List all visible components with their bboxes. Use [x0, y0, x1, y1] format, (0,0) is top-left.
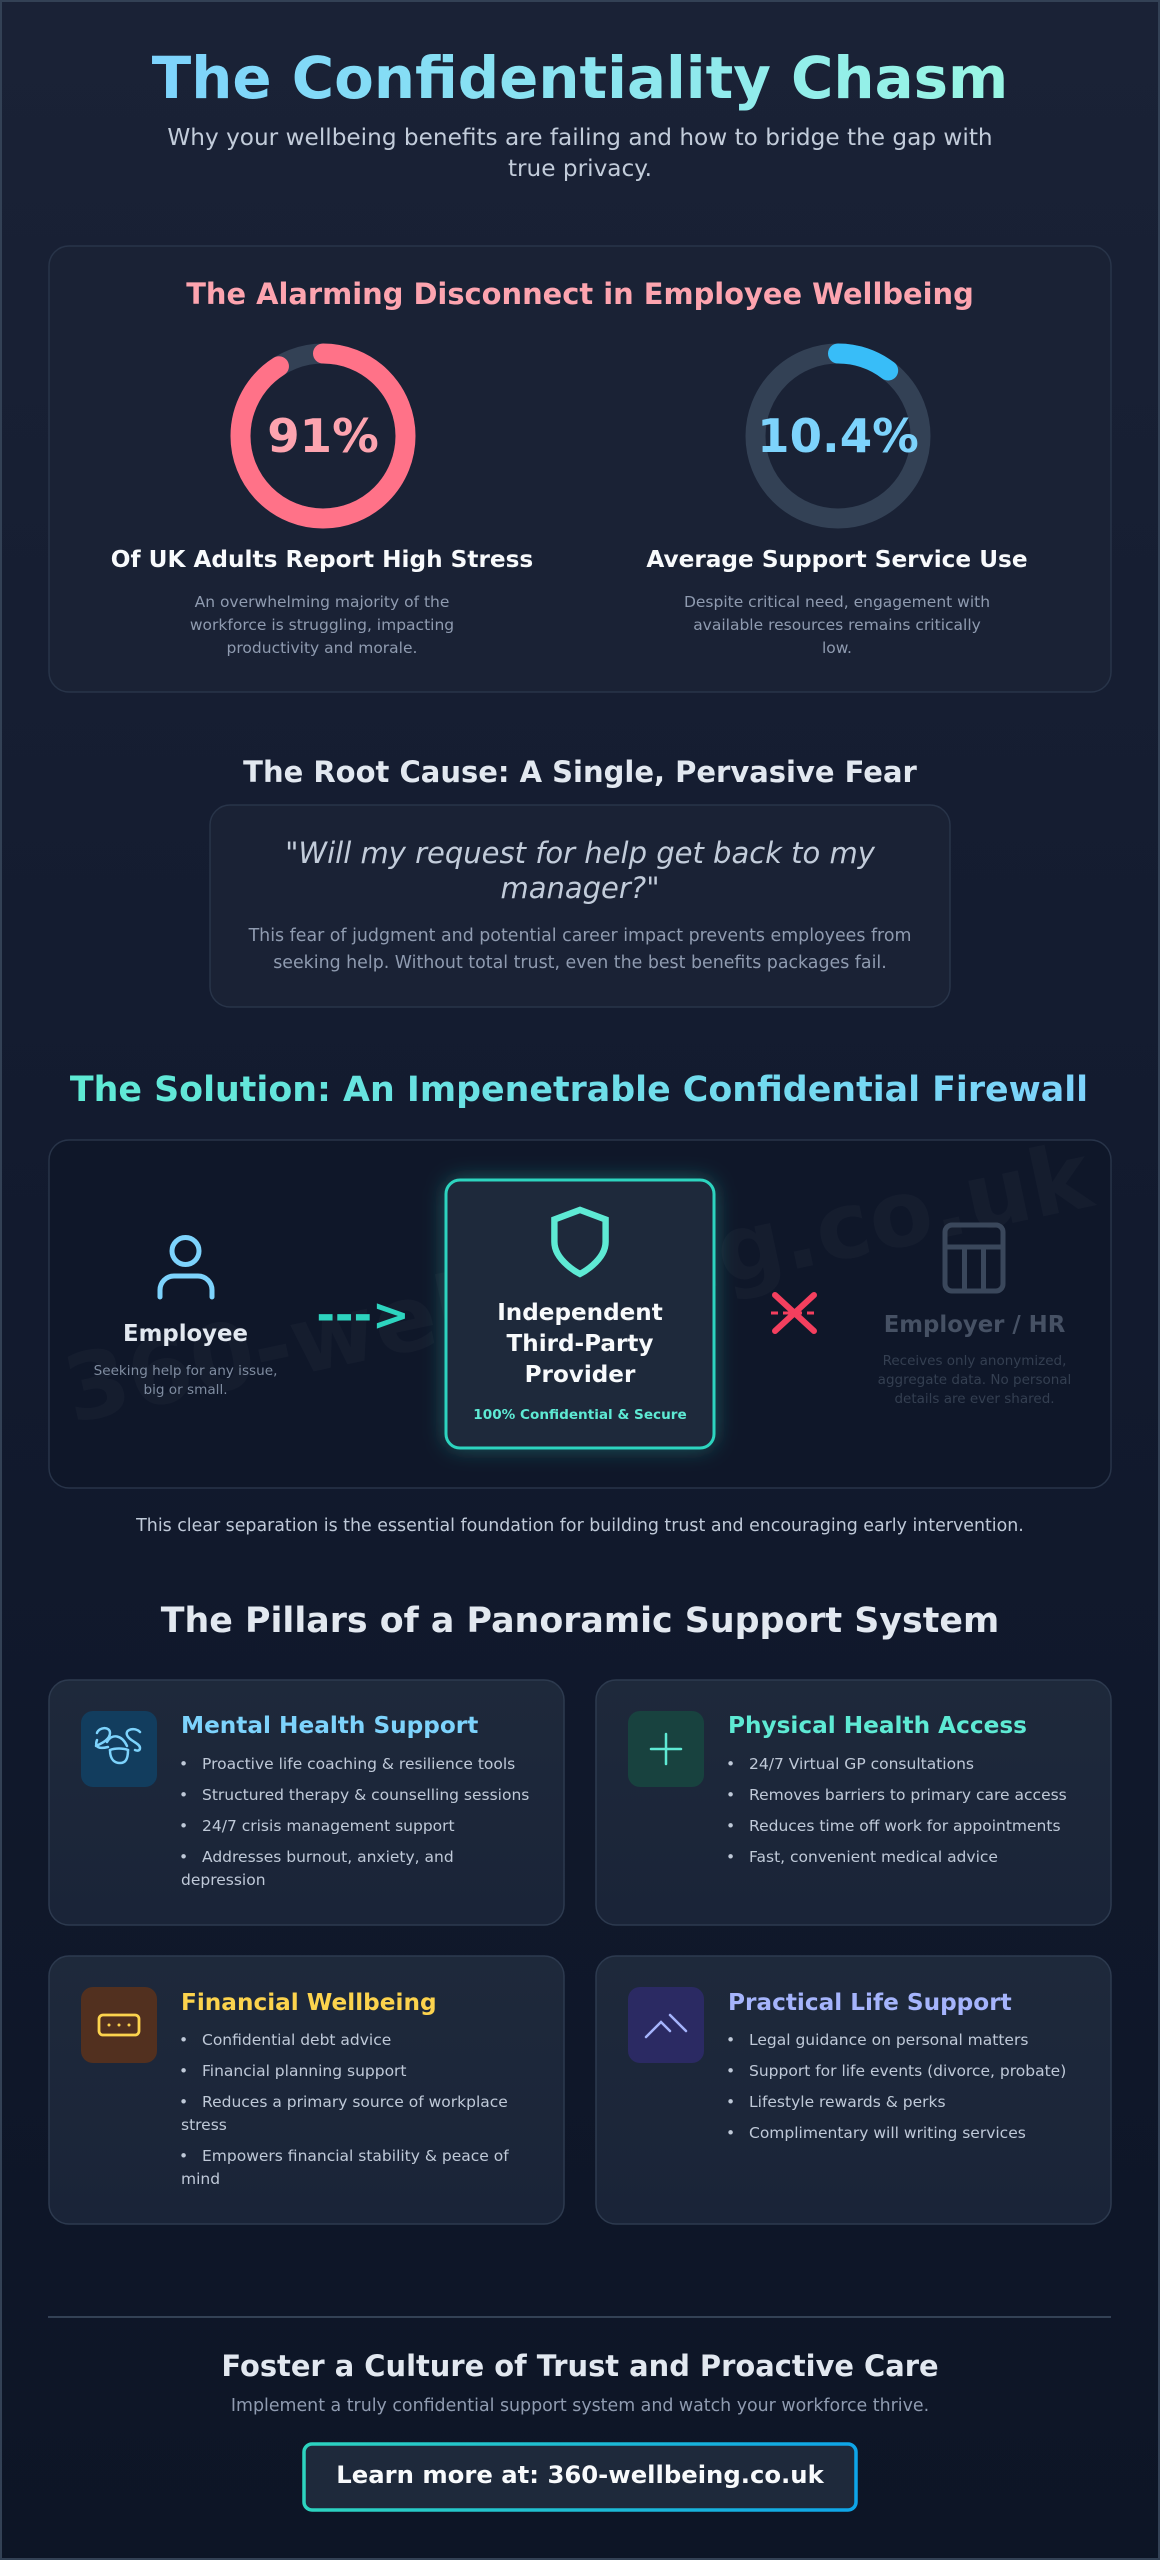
stat description: Despite critical need, engagement with	[684, 593, 990, 611]
benefit list: •	[179, 2031, 188, 2049]
benefit list: 24/7 crisis management support	[202, 1817, 455, 1835]
benefit list: •	[726, 1817, 735, 1835]
firewall caption: This clear separation is the essential foundation for building trust and encouraging early intervention.	[135, 1516, 1024, 1536]
benefit list: Complimentary will writing services	[749, 2124, 1026, 2142]
benefit list: Empowers financial stability & peace of	[202, 2147, 509, 2165]
provider name	[497, 1300, 663, 1388]
benefit list: Financial planning support	[202, 2062, 406, 2080]
watermark: 360-wellbeing.co.uk	[55, 1122, 1102, 1444]
quote explanation: This fear of judgment and potential career impact prevents employees from	[248, 926, 911, 946]
stat description: An overwhelming majority of the	[195, 593, 449, 611]
benefit list: Reduces time off work for appointments	[749, 1817, 1061, 1835]
arrow: employee to provider: --->	[316, 1288, 410, 1341]
stat: 91% stress	[111, 354, 533, 657]
quote explanation	[248, 926, 911, 973]
call to action button	[304, 2444, 856, 2510]
benefit list: •	[179, 1755, 188, 1773]
subtitle: true privacy.	[508, 155, 652, 182]
card title: Practical Life Support	[728, 1989, 1012, 2016]
provider name: Provider	[525, 1362, 636, 1388]
benefit list	[726, 2031, 1066, 2142]
quote text: manager?"	[500, 871, 660, 905]
benefit list: Legal guidance on personal matters	[749, 2031, 1028, 2049]
donut chart: 91%	[240, 354, 406, 518]
icon: plus	[628, 1711, 704, 1787]
icon: person	[160, 1238, 212, 1297]
employee description	[94, 1363, 277, 1398]
footer subtext: Implement a truly confidential support system and watch your workforce thrive.	[231, 2396, 929, 2416]
provider name: Independent	[497, 1300, 663, 1326]
card title: Physical Health Access	[728, 1712, 1027, 1739]
stat label: Of UK Adults Report High Stress	[111, 546, 533, 573]
benefit list	[179, 1755, 529, 1889]
title: The Confidentiality Chasm	[152, 44, 1008, 112]
benefit list: Addresses burnout, anxiety, and	[202, 1848, 454, 1866]
icon: brain	[81, 1711, 157, 1787]
benefit list: •	[179, 2062, 188, 2080]
employee column	[94, 1238, 277, 1398]
stat label: Average Support Service Use	[646, 546, 1028, 573]
icon: building	[945, 1225, 1003, 1291]
benefit list: Confidential debt advice	[202, 2031, 391, 2049]
quote explanation: seeking help. Without total trust, even the best benefits packages fail.	[273, 953, 887, 973]
benefit list: 24/7 Virtual GP consultations	[749, 1755, 974, 1773]
panel: quote	[210, 805, 950, 1007]
quote text: "Will my request for help get back to my	[285, 836, 876, 870]
benefit list: Fast, convenient medical advice	[749, 1848, 998, 1866]
employer column	[878, 1225, 1071, 1407]
stat: 10.4% usage	[646, 354, 1028, 657]
benefit list: Lifestyle rewards & perks	[749, 2093, 946, 2111]
benefit list: •	[179, 1817, 188, 1835]
benefit list: Reduces a primary source of workplace	[202, 2093, 508, 2111]
heading: alarming disconnect: The Alarming Disconnect in Employee Wellbeing	[186, 277, 974, 311]
subtitle	[167, 124, 993, 182]
card title: Financial Wellbeing	[181, 1989, 437, 2016]
employer description: details are ever shared.	[894, 1391, 1055, 1407]
employer label: Employer / HR	[884, 1312, 1066, 1338]
provider name: Third-Party	[506, 1331, 654, 1357]
card: mental health	[49, 1680, 564, 1925]
stat description	[684, 593, 990, 657]
benefit list: stress	[181, 2116, 227, 2134]
stat description: productivity and morale.	[227, 639, 417, 657]
benefit list: •	[726, 2124, 735, 2142]
benefit list: •	[726, 2031, 735, 2049]
donut chart: 10.4%: 10.4%	[757, 409, 919, 463]
benefit list: •	[179, 1848, 188, 1866]
quote text	[285, 836, 876, 905]
stat description: low.	[822, 639, 852, 657]
provider tag: 100% Confidential & Secure	[473, 1407, 687, 1423]
employer description	[878, 1353, 1071, 1407]
card: physical health	[596, 1680, 1111, 1925]
benefit list: •	[179, 1786, 188, 1804]
employer description: Receives only anonymized,	[883, 1353, 1066, 1369]
benefit list	[179, 2031, 509, 2188]
benefit list: Removes barriers to primary care access	[749, 1786, 1067, 1804]
stat description	[190, 593, 454, 657]
stat description: available resources remains critically	[693, 616, 981, 634]
icon: roof lines	[628, 1987, 704, 2063]
heading: solution: The Solution: An Impenetrable Confidential Firewall	[70, 1070, 1088, 1110]
footer heading: Foster a Culture of Trust and Proactive Care	[221, 2349, 939, 2383]
donut chart: 10.4%	[756, 354, 920, 518]
benefit list: •	[726, 1786, 735, 1804]
call to action button: Learn more at: 360-wellbeing.co.uk	[336, 2460, 825, 2489]
provider box	[446, 1180, 714, 1448]
donut chart: 91%: 91%	[267, 409, 379, 463]
card: practical life	[596, 1956, 1111, 2224]
benefit list: Support for life events (divorce, probate)	[749, 2062, 1066, 2080]
card: financial wellbeing	[49, 1956, 564, 2224]
icon: wallet	[81, 1987, 157, 2063]
benefit list: •	[179, 2093, 188, 2111]
benefit list: •	[726, 1755, 735, 1773]
employer description: aggregate data. No personal	[878, 1372, 1071, 1388]
panel: alarming disconnect	[49, 246, 1111, 692]
icon: shield	[554, 1210, 606, 1274]
benefit list: Proactive life coaching & resilience tools	[202, 1755, 515, 1773]
benefit list: •	[179, 2147, 188, 2165]
benefit list: depression	[181, 1871, 266, 1889]
panel: firewall diagram	[49, 1122, 1111, 1488]
heading: root cause: The Root Cause: A Single, Pervasive Fear	[243, 755, 918, 789]
employee label: Employee	[123, 1321, 248, 1347]
employee description: big or small.	[143, 1382, 228, 1398]
benefit list: Structured therapy & counselling sessions	[202, 1786, 529, 1804]
benefit list: •	[726, 1848, 735, 1866]
benefit list: mind	[181, 2170, 220, 2188]
subtitle: Why your wellbeing benefits are failing and how to bridge the gap with	[167, 124, 993, 151]
heading: pillars: The Pillars of a Panoramic Support System	[161, 1601, 999, 1641]
employee description: Seeking help for any issue,	[94, 1363, 277, 1379]
benefit list	[726, 1755, 1067, 1866]
card title: Mental Health Support	[181, 1712, 478, 1739]
icon: blocked connection	[771, 1295, 816, 1331]
benefit list: •	[726, 2093, 735, 2111]
stat description: workforce is struggling, impacting	[190, 616, 454, 634]
benefit list: •	[726, 2062, 735, 2080]
